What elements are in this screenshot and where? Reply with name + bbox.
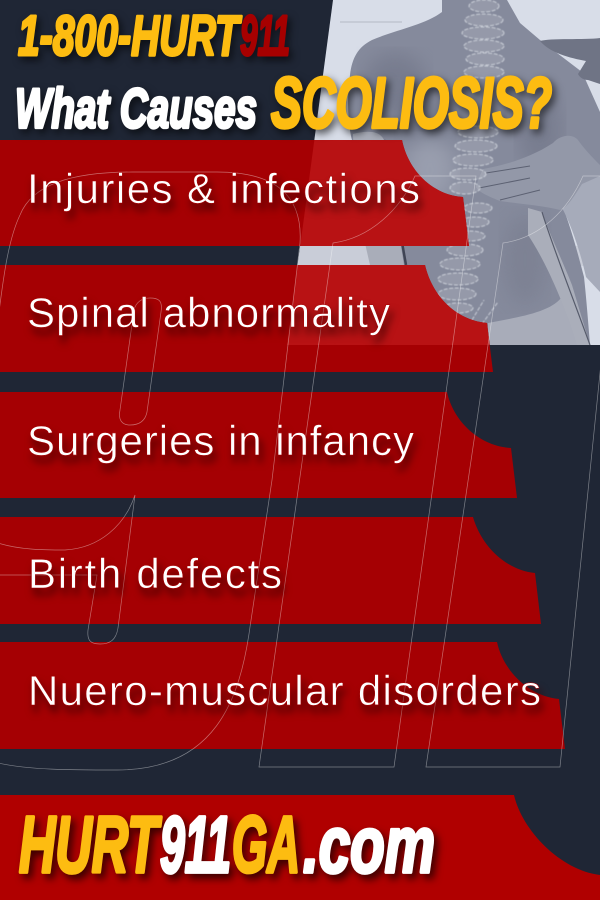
footer band [0,795,600,900]
cause: surgeries in infancy: Surgeries in infancy [27,417,414,464]
phone number: 1-800-HURT [18,4,242,68]
cause: neuro-muscular disorders: Nuero-muscular disorders [28,667,541,714]
lower hand [476,136,600,210]
heading: What Causes [15,76,257,140]
heading [15,64,552,144]
bar: injuries and infections [0,140,469,246]
website address: HURT [19,800,162,889]
bar: neuro-muscular disorders [0,642,565,749]
photo: woman's back with highlighted spine [280,0,600,345]
spine vertebrae [438,0,504,324]
towel at the waist [488,298,578,345]
bar: surgeries in infancy [0,392,517,498]
website address: GA [232,800,300,889]
website address: .com [303,800,435,889]
towel at the right side [528,208,590,345]
website address: 911 [160,800,231,889]
bar: spinal abnormality [0,265,493,372]
bar: birth defects [0,517,541,624]
right arm and flank [562,176,600,292]
towel at the left side [353,132,404,265]
phone number: 911 [240,4,290,68]
outlined 911 watermark [0,172,600,770]
cause: injuries and infections: Injuries & infections [27,165,420,212]
cause: spinal abnormality: Spinal abnormality [27,289,390,336]
upper hand [540,38,600,84]
cause: birth defects: Birth defects [28,550,282,597]
website address [19,800,435,889]
